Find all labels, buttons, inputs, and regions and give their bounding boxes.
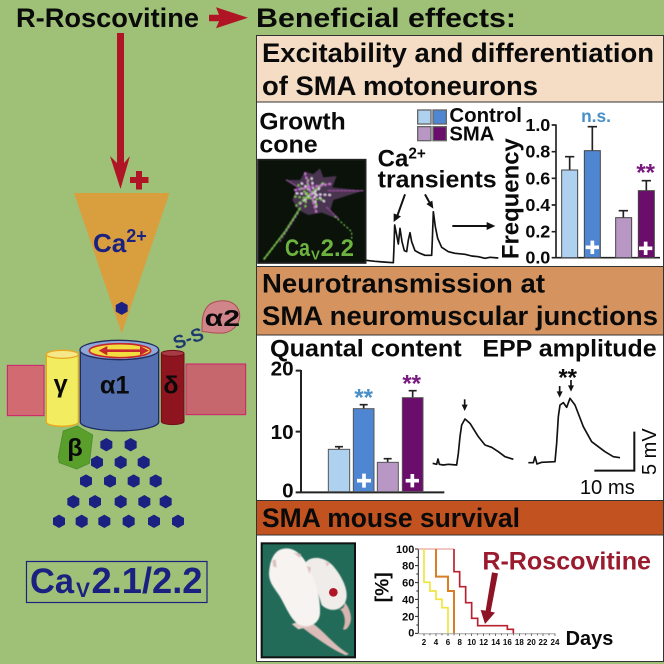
subunit gamma: γ [54, 371, 68, 399]
trace: calcium transients [366, 212, 498, 263]
bar chart: quantal content: 0 [282, 479, 294, 502]
subunit alpha 2 [202, 301, 240, 333]
y axis labels: 0.6 [525, 168, 550, 188]
trace: EPP R-Roscovitine: ** [558, 364, 578, 391]
bar chart: quantal content [271, 358, 444, 502]
x axis labels: 22 [539, 638, 548, 647]
legend: control and SMA: SMA [449, 123, 494, 145]
panel header: excitability and differentiation: of SMA motoneurons [262, 71, 538, 101]
y axis title: Frequency [497, 138, 524, 259]
heading: growth cone: Growth [259, 108, 346, 135]
panel header: neurotransmission: Neurotransmission at [262, 268, 545, 298]
scale bar: 5 mV [639, 428, 661, 475]
y axis labels: 0 [408, 628, 414, 640]
scale bar: 10 ms [580, 477, 635, 499]
label: Ca2+ transients: 2+ [408, 146, 426, 163]
y axis labels: 20 [402, 612, 414, 624]
x axis labels: 6 [446, 638, 451, 647]
x axis labels: 10 [467, 638, 477, 647]
scale bar [580, 428, 661, 499]
x axis labels: 14 [491, 638, 501, 647]
trace: EPP R-Roscovitine [528, 364, 620, 464]
x axis labels: 4 [434, 638, 439, 647]
label: Ca2+ transients: transients [378, 166, 497, 193]
subunit alpha 2: α2 [205, 305, 240, 331]
heading: EPP amplitude: EPP amplitude [482, 336, 657, 363]
label box: CaV2.1/2.2 [26, 560, 207, 602]
panel header: neurotransmission: SMA neuromuscular junctions [262, 301, 658, 331]
survival chart [372, 544, 613, 650]
subunit beta [58, 426, 93, 469]
membrane left [7, 365, 44, 416]
bar chart: frequency [497, 106, 660, 268]
title: Beneficial effects: Beneficial effects: [256, 3, 516, 33]
legend: control and SMA: Control [449, 105, 522, 127]
subunit delta: δ [163, 371, 179, 399]
y axis labels: 100 [396, 544, 414, 556]
label: Ca2+: 2+ [126, 226, 147, 246]
arrow: to red curve [481, 572, 498, 624]
x axis labels: 8 [457, 638, 462, 647]
label: Ca2+ transients: Ca [378, 146, 408, 173]
label: CaV2.2: Ca [285, 235, 311, 262]
heading: growth cone: cone [259, 132, 318, 159]
heading: quantal content: Quantal content [270, 336, 462, 363]
panel header: excitability and differentiation: Excitability and differentiation [262, 38, 654, 68]
panel header: excitability and differentiation [256, 36, 664, 102]
y axis labels: 1.0 [525, 115, 550, 135]
label: R-Roscovitine: R-Roscovitine [482, 547, 651, 575]
bar chart: frequency: ** [636, 160, 656, 187]
x axis labels: 18 [515, 638, 524, 647]
arrow: R-Roscovitine acts on channel [110, 33, 130, 189]
title: R-Roscovitine: R-Roscovitine [16, 3, 199, 33]
y axis labels: 60 [402, 578, 414, 590]
panel: neurotransmission content [270, 336, 661, 502]
y axis labels: 0.0 [525, 248, 550, 268]
significance labels: n.s. [581, 106, 611, 126]
label box: CaV2.1/2.2: V [76, 579, 90, 602]
label box: CaV2.1/2.2: Ca [30, 562, 75, 601]
y axis labels: 40 [402, 594, 414, 606]
label: Ca2+: Ca [93, 228, 126, 258]
icon: calcium ion [116, 302, 128, 315]
subunit alpha 1 [80, 340, 159, 431]
arrow: title to effects [209, 7, 248, 28]
calcium influx cone [74, 193, 170, 334]
y axis labels: 0.8 [525, 141, 550, 161]
bar chart: quantal content: ** [354, 384, 374, 411]
curve: yellow [424, 549, 448, 633]
curve: top line [418, 547, 454, 551]
right column background [256, 36, 664, 662]
micrograph: growth cone [258, 160, 366, 263]
label: Ca2+ transients [378, 146, 497, 193]
panel: survival content [262, 543, 651, 657]
membrane right [186, 364, 246, 415]
icon: plus sign [130, 171, 148, 190]
x axis labels: 20 [527, 638, 536, 647]
bar chart: quantal content: 20 [271, 358, 294, 381]
bar chart: quantal content: 10 [271, 421, 294, 444]
y axis labels: 80 [402, 561, 414, 573]
curve: red [454, 549, 513, 633]
bar chart: quantal content: ** [402, 370, 422, 397]
y axis labels [525, 115, 550, 268]
legend: control and SMA [418, 105, 522, 145]
x axis labels: 16 [503, 638, 512, 647]
arrow: to frequency chart [452, 222, 495, 230]
curve: orange [436, 549, 454, 633]
panel header: survival [256, 500, 664, 535]
y axis labels: 0.2 [525, 222, 550, 242]
x axis labels: 2 [422, 638, 427, 647]
panel header: neurotransmission [256, 266, 664, 335]
trace: EPP control [433, 399, 513, 465]
marker: treated mouse [329, 588, 338, 597]
diagram: CaV channel [7, 301, 246, 528]
photo: SMA mice [262, 543, 355, 657]
subunit gamma [46, 350, 78, 426]
y axis title: [%] [372, 572, 393, 602]
label: S-S bond: S-S [170, 323, 206, 353]
subunit beta: β [67, 434, 83, 462]
arrows: to transients [394, 194, 433, 222]
y axis labels: 0.4 [525, 195, 550, 215]
label: CaV2.2: V [311, 247, 320, 262]
panel header: survival: SMA mouse survival [262, 503, 520, 533]
panel: excitability content [258, 105, 660, 268]
label: Days: Days [566, 628, 613, 650]
y axis labels [396, 544, 414, 640]
label box: CaV2.1/2.2: 2.1/2.2 [92, 560, 202, 601]
label: CaV2.2: 2.2 [321, 235, 354, 262]
x axis labels: 12 [479, 638, 489, 647]
calcium ions [53, 438, 184, 528]
subunit delta [161, 350, 184, 425]
label: CaV2.2 [285, 235, 354, 262]
x axis labels: 24 [551, 638, 560, 647]
x axis labels [422, 638, 560, 647]
subunit alpha 1: α1 [100, 371, 130, 399]
heading: growth cone [259, 108, 346, 159]
